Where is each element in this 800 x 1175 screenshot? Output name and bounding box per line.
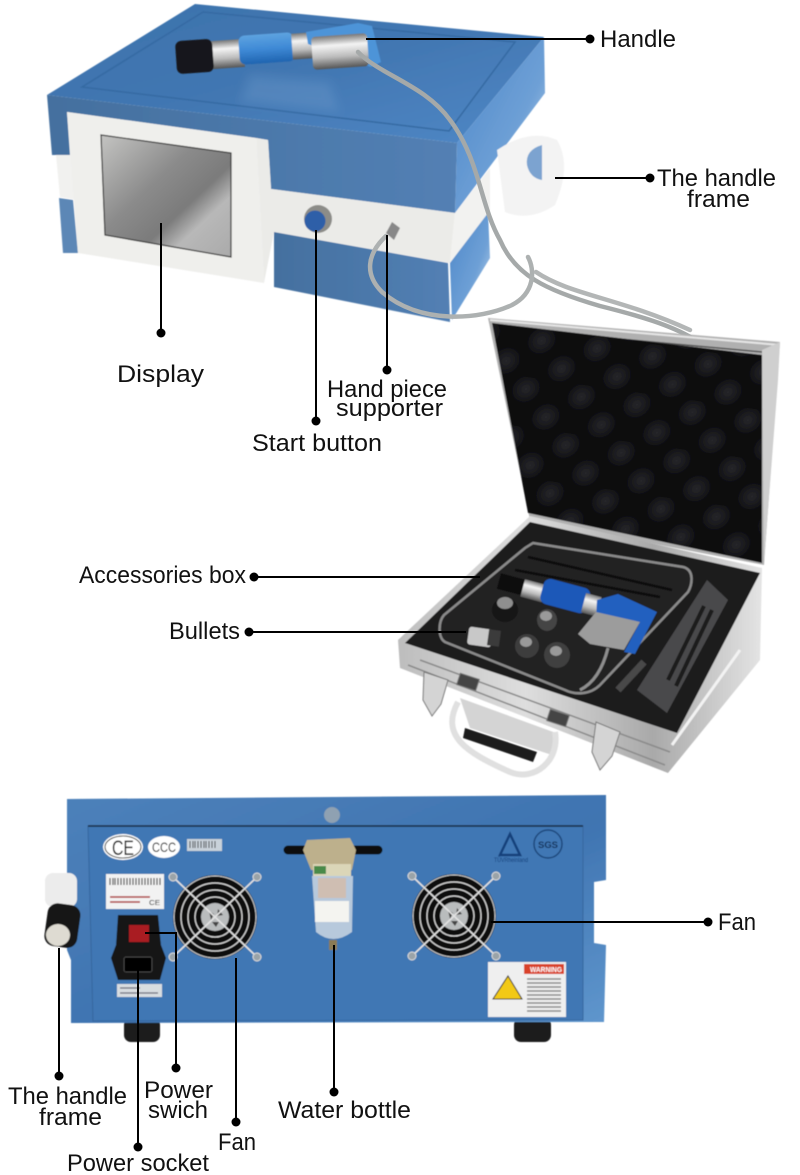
accessory black tip <box>497 573 526 595</box>
callout: hand piece supporter <box>327 235 447 422</box>
rear body <box>67 795 606 1023</box>
TUV mark <box>494 834 528 864</box>
warning sticker: WARNING <box>530 967 563 974</box>
case hinge frame <box>762 342 780 562</box>
callout: accessories box <box>79 562 480 589</box>
serial number label: CE <box>149 900 160 907</box>
callout: bullets: Bullets <box>169 618 240 645</box>
callout: power switch <box>144 933 213 1124</box>
CCC mark: CCC <box>152 839 176 855</box>
packaged cable bag <box>637 580 728 713</box>
display screen <box>101 135 231 257</box>
device white side <box>450 168 490 263</box>
handpiece blue grip <box>238 32 295 65</box>
case latches <box>423 672 620 770</box>
SGS mark <box>534 830 562 858</box>
bullet 1 <box>492 598 518 622</box>
accessory silver barrel <box>520 579 546 602</box>
bottle drain <box>329 940 337 950</box>
device: front view of main unit <box>47 4 564 322</box>
callout: start button: Start button <box>252 430 382 457</box>
callout: rear handle frame: frame <box>39 1104 102 1131</box>
cables <box>358 52 692 338</box>
display bezel <box>67 112 264 283</box>
device lower right side <box>450 213 490 320</box>
bullet 3 <box>467 626 493 648</box>
case handle <box>452 698 556 774</box>
device mid white band <box>256 138 455 283</box>
device right side <box>455 37 545 213</box>
power rating label <box>117 984 162 997</box>
device lower blue front <box>274 232 450 322</box>
callout: power switch: Power <box>144 1077 213 1104</box>
bottle brass head <box>303 838 356 870</box>
accessory neck <box>581 593 602 617</box>
handle loop <box>452 702 556 774</box>
bottle sticker <box>315 901 349 922</box>
bottle clear cup <box>312 876 353 939</box>
handle grip <box>463 728 537 762</box>
lid reflection <box>240 75 340 112</box>
accessory handpiece <box>497 573 657 654</box>
handpiece on top of device <box>175 23 381 74</box>
barcode sticker <box>187 839 222 851</box>
case slots <box>515 557 672 597</box>
callout: hand piece supporter: supporter <box>336 395 443 422</box>
hand piece connector <box>386 222 400 240</box>
connector cable <box>370 236 532 317</box>
callout: left fan <box>218 958 256 1156</box>
warning sticker <box>488 962 566 1017</box>
water bottle <box>288 838 378 950</box>
callout: the handle frame <box>555 165 776 213</box>
callout: the handle frame: The handle <box>657 165 776 192</box>
callout: the handle frame: frame <box>687 186 750 213</box>
handpiece blue head <box>306 23 381 67</box>
CCC mark <box>148 836 180 858</box>
rear inner plate <box>88 826 583 1021</box>
handle frame bracket <box>497 136 564 216</box>
red rocker switch <box>129 925 149 942</box>
callout: bullets <box>169 618 466 645</box>
accessory silver body <box>578 612 640 650</box>
bottle air fittings <box>288 846 378 854</box>
CE mark: CE <box>112 837 134 860</box>
case recess <box>440 543 692 693</box>
callout: power socket <box>67 966 209 1175</box>
callout: right fan <box>491 909 756 936</box>
case lid foam <box>492 323 762 563</box>
left fan <box>169 873 261 961</box>
callout: rear handle frame: The handle <box>8 1083 127 1110</box>
QC sticker <box>324 807 340 823</box>
start button <box>304 205 332 233</box>
handpiece silver barrel <box>211 39 245 69</box>
callout: start button <box>252 230 382 457</box>
accessory blue grip <box>539 577 592 615</box>
handpiece neck <box>291 32 313 60</box>
socket <box>124 957 152 972</box>
handpiece cable <box>358 52 692 338</box>
serial number label <box>106 874 164 909</box>
bullet 5 <box>544 642 570 668</box>
bottle green label <box>313 864 351 876</box>
device lower blue left <box>59 198 78 253</box>
right fan <box>408 872 500 960</box>
callout: display: Display <box>117 361 204 388</box>
callout: water bottle: Water bottle <box>278 1097 411 1124</box>
callout: right fan: Fan <box>718 909 756 936</box>
TUV mark: TÜVRheinland <box>494 856 528 864</box>
rear feet <box>124 1018 551 1042</box>
handle plate <box>460 698 556 755</box>
cable plug <box>580 648 608 690</box>
handle frame hole <box>527 145 542 180</box>
callout: hand piece supporter: Hand piece <box>327 376 447 403</box>
callout: accessories box: Accessories box <box>79 562 246 589</box>
callout: handle <box>366 26 676 53</box>
bullet 2 <box>537 609 557 631</box>
device front upper blue block <box>47 95 457 213</box>
handpiece silver head <box>311 33 369 70</box>
device lid top <box>47 4 544 143</box>
rear handle frame knob <box>43 873 82 949</box>
CE mark <box>103 834 143 860</box>
accessory blue head <box>596 594 657 654</box>
SGS mark: SGS <box>538 840 558 850</box>
device: rear view of main unit <box>43 795 606 1042</box>
callout: handle: Handle <box>600 26 676 53</box>
case lid frame <box>488 318 780 565</box>
handpiece black knob <box>175 39 214 74</box>
accessories case <box>398 318 780 774</box>
bullets <box>467 597 570 668</box>
callout: water bottle <box>278 945 411 1124</box>
power module <box>111 915 166 980</box>
callout: left fan: Fan <box>218 1129 256 1156</box>
case base rim <box>398 516 762 773</box>
case base foam <box>405 522 760 733</box>
bullet 4 <box>515 634 539 658</box>
cable continuation to case <box>536 272 690 330</box>
device left white gap <box>56 155 78 200</box>
callout: power switch: swich <box>148 1097 208 1124</box>
callout: display <box>117 223 204 388</box>
callout: rear handle frame <box>8 948 127 1131</box>
